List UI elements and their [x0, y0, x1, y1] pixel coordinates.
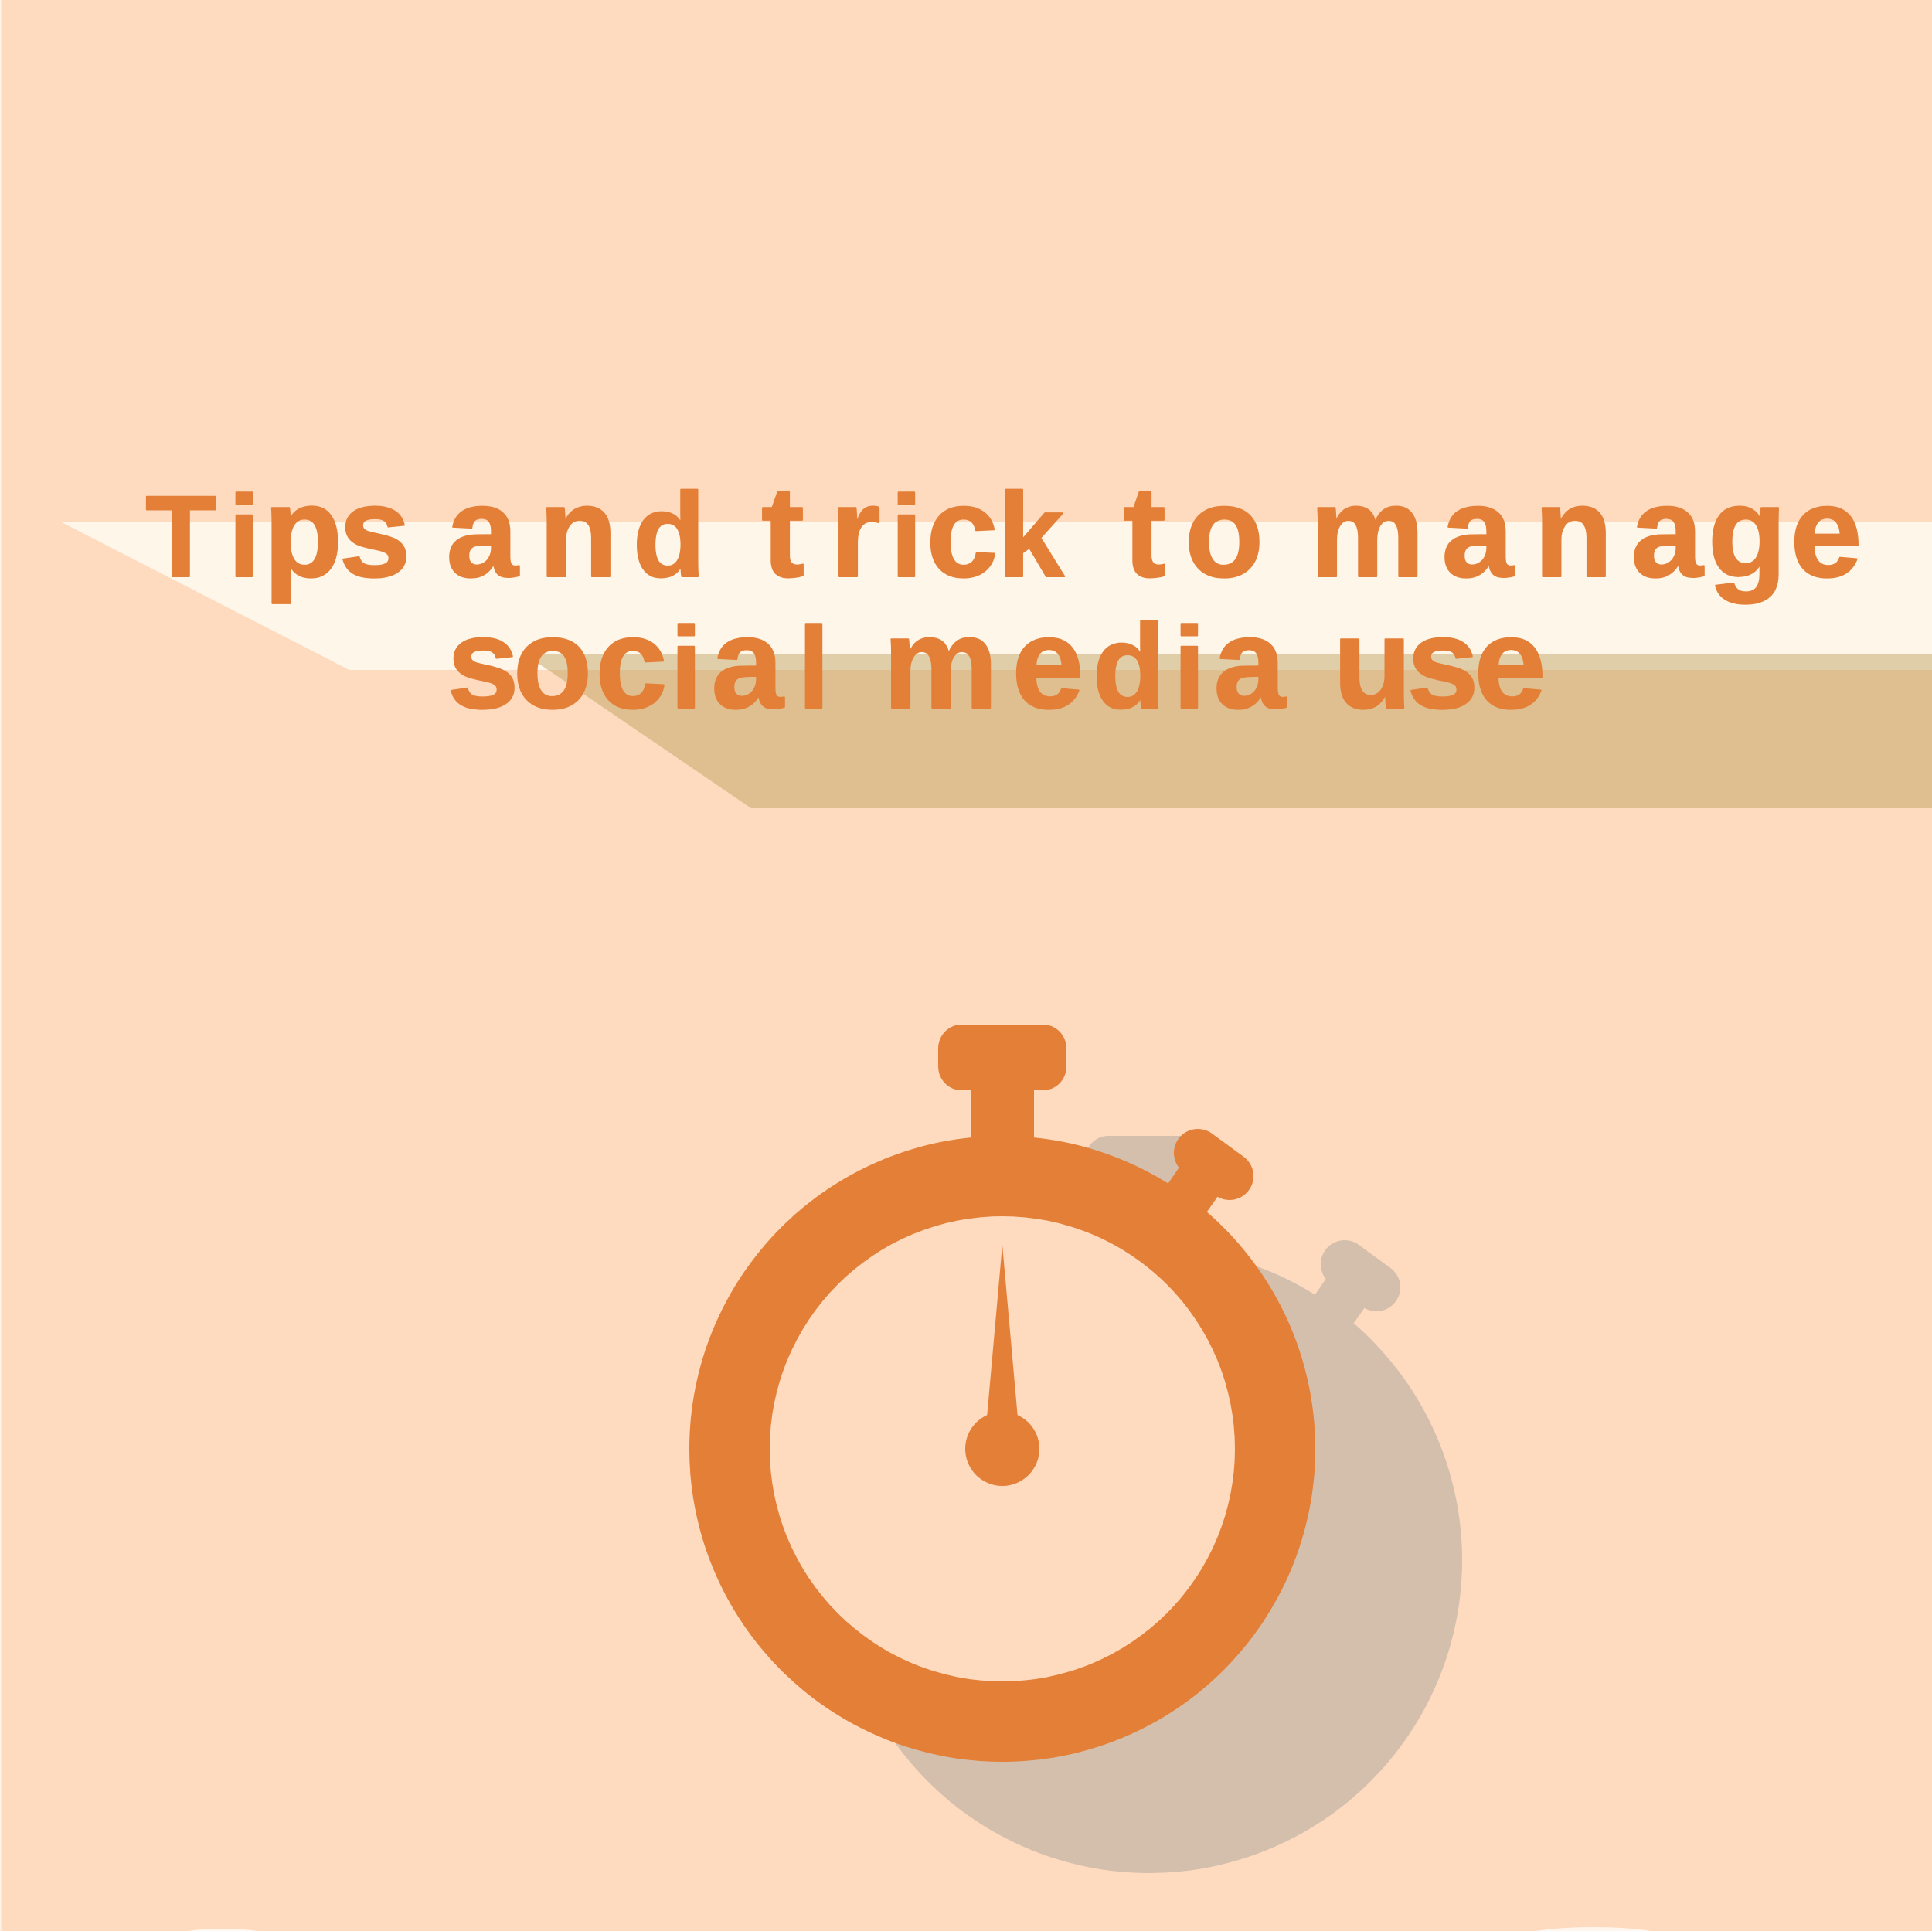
- ribbon: cream banner: [62, 522, 1932, 670]
- title line 2: i: [670, 603, 702, 733]
- ribbon: tan shadow band: [526, 654, 1932, 808]
- title line 2: u: [1333, 590, 1412, 736]
- bottom white blob right: [1526, 1927, 1662, 1931]
- title line 1: a: [1441, 459, 1515, 604]
- title line 1: c: [926, 459, 998, 604]
- stopwatch side button stem: [1158, 1151, 1229, 1227]
- stopwatch face: [770, 1216, 1235, 1681]
- title line 1: i: [228, 471, 260, 601]
- ribbon: overlap strip: [526, 654, 1932, 670]
- title line 1: k: [998, 468, 1065, 602]
- title line 1: n: [539, 459, 617, 604]
- title line 1: T: [145, 471, 216, 601]
- title line 1: a: [1631, 459, 1704, 604]
- stopwatch needle: [987, 1245, 1018, 1418]
- title line 1: p: [264, 459, 342, 604]
- title: [145, 459, 1862, 736]
- title line 2: [447, 590, 1546, 736]
- title line 2: e: [1474, 590, 1546, 736]
- stopwatch side button: [1198, 1153, 1230, 1176]
- title line 2: c: [595, 590, 668, 736]
- title line 1: d: [633, 468, 706, 602]
- title line 1: [145, 459, 1862, 604]
- stopwatch shadow: [836, 1136, 1462, 1873]
- title line 2: s: [1406, 590, 1479, 736]
- title line 2: o: [513, 590, 592, 736]
- title line 2: e: [1012, 590, 1084, 736]
- title line 1: a: [446, 459, 519, 604]
- title line 1: m: [1309, 459, 1425, 604]
- title line 1: s: [338, 459, 411, 604]
- stopwatch stem: [971, 1082, 1034, 1159]
- bottom white blob left: [176, 1929, 269, 1931]
- stopwatch ring: [689, 1136, 1315, 1762]
- title line 2: d: [1093, 600, 1165, 733]
- title line 2: i: [1173, 603, 1206, 733]
- title line 2: m: [883, 590, 998, 736]
- title line 1: t: [1123, 459, 1166, 604]
- title line 2: s: [447, 590, 519, 736]
- title line 2: l: [798, 603, 830, 733]
- title line 2: a: [1213, 590, 1287, 736]
- title line 1: g: [1708, 459, 1787, 604]
- title line 1: r: [830, 459, 881, 604]
- stopwatch hub: [965, 1412, 1039, 1486]
- stopwatch: [689, 1025, 1315, 1762]
- title line 1: o: [1185, 459, 1264, 604]
- title line 1: e: [1790, 459, 1862, 604]
- title line 2: a: [711, 590, 784, 736]
- title line 1: t: [761, 459, 804, 604]
- stopwatch crown: [938, 1025, 1066, 1090]
- title line 1: n: [1534, 459, 1613, 604]
- title line 1: i: [890, 471, 923, 601]
